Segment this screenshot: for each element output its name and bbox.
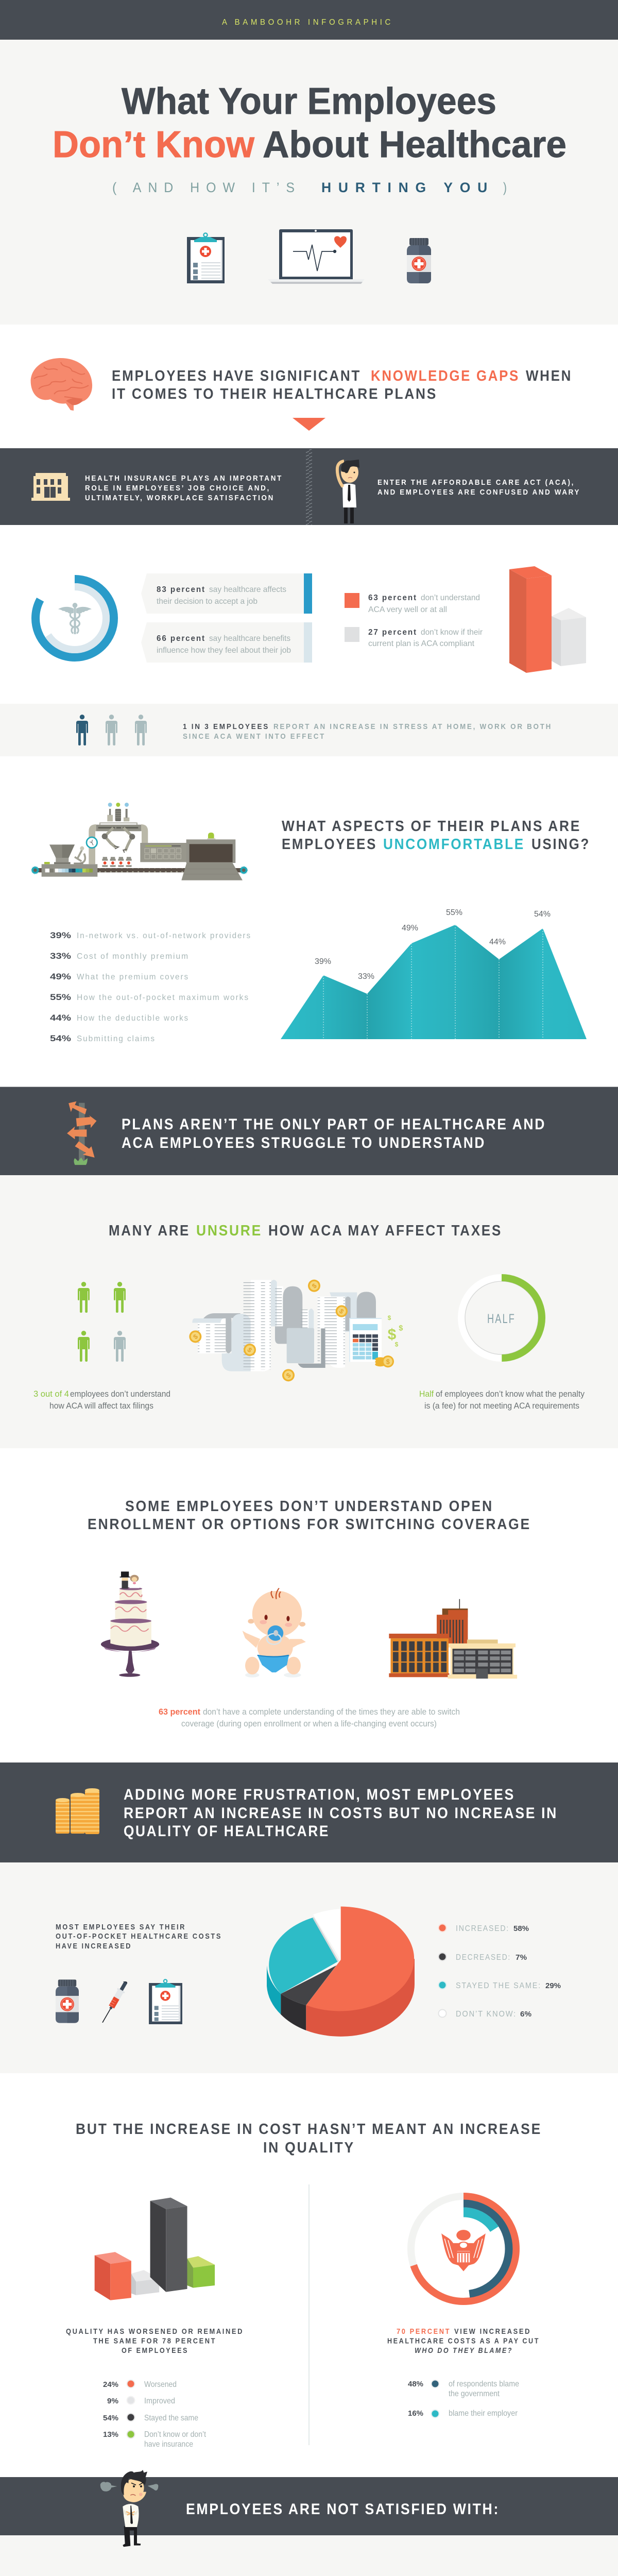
illustration: receipts and calculator: $	[285, 1371, 293, 1379]
heading: uncomfortable: WHAT ASPECTS OF THEIR PLANS ARE	[282, 818, 581, 835]
text: 70 percent pay cut	[387, 2327, 540, 2355]
text: 70 percent pay cut: VIEW INCREASED	[454, 2327, 531, 2336]
legend: pie: INCREASED:	[456, 1924, 509, 1933]
list: uncomfortable aspects: 44%	[50, 1013, 71, 1023]
subtitle: HURTING YOU	[321, 180, 494, 195]
list: uncomfortable aspects: 54%	[50, 1033, 71, 1043]
text: 63 percent coverage: coverage (during open enrollment or when a life-changing event occurs)	[181, 1719, 437, 1728]
chart: nested ring 83 and 66 percent	[36, 579, 114, 657]
heading: knowledge gaps: KNOWLEDGE GAPS	[371, 368, 520, 384]
text: job choice: HEALTH INSURANCE PLAYS AN IMPORTANT	[85, 474, 283, 483]
title: Don’t Know	[53, 124, 255, 165]
text: quality worsened: THE SAME FOR 78 PERCENT	[93, 2337, 216, 2345]
stat: 27 percent: 27 percent	[368, 628, 417, 637]
legend: blame: the government	[449, 2389, 500, 2398]
text: 3 out of 4: 3 out of 4	[33, 1389, 69, 1399]
callout: 83 percent: say healthcare affects	[209, 585, 286, 594]
legend: blame: 48%	[408, 2380, 423, 2388]
heading: plans	[122, 1116, 546, 1151]
text: half of employees: of employees don’t know what the penalty	[436, 1389, 585, 1399]
text: stress: SINCE ACA WENT INTO EFFECT	[183, 732, 325, 741]
chart: area uncomfortable: 44%	[489, 938, 506, 946]
heading: knowledge gaps: EMPLOYEES HAVE SIGNIFICANT	[112, 368, 361, 384]
legend: quality: 13%	[103, 2430, 118, 2439]
chart: 3d bars quality	[95, 2198, 215, 2300]
text: costs increased	[56, 1923, 222, 1951]
illustration: receipts and calculator: $	[386, 1358, 390, 1365]
text: quality worsened	[66, 2327, 244, 2355]
legend: quality	[103, 2380, 206, 2449]
text: 3 out of 4: employees don’t understand	[70, 1389, 170, 1399]
text: 63 percent coverage	[159, 1707, 460, 1728]
icon: angry employee	[100, 2470, 158, 2547]
heading: unsure	[109, 1223, 502, 1239]
legend: pie: 7%	[516, 1953, 527, 1962]
list: uncomfortable aspects: Submitting claims	[77, 1035, 156, 1043]
text: costs increased: OUT-OF-POCKET HEALTHCARE COSTS	[56, 1932, 222, 1941]
panel: 1 in 3 stress	[0, 704, 618, 756]
legend: pie	[439, 1924, 561, 2019]
stat: 63 percent: 63 percent	[368, 594, 417, 602]
heading: unsure: UNSURE	[196, 1223, 262, 1239]
icon: bottle	[56, 1979, 79, 2023]
heading: uncomfortable	[282, 818, 590, 853]
heading: plans: ACA EMPLOYEES STRUGGLE TO UNDERSTAND	[122, 1134, 486, 1151]
subtitle: ( AND HOW IT’S	[112, 180, 301, 195]
illustration: receipts and calculator: $	[192, 1333, 199, 1341]
legend: pie: 58%	[513, 1924, 529, 1933]
stat: 63 percent: ACA very well or at all	[368, 605, 447, 614]
callout: 66 percent: 66 percent	[157, 634, 205, 643]
list: uncomfortable aspects: 55%	[50, 992, 71, 1002]
legend: pie: STAYED THE SAME:	[456, 1981, 541, 1990]
panel: not satisfied	[0, 2470, 618, 2576]
heading: no increase in quality: BUT THE INCREASE IN COST HASN’T MEANT AN INCREASE	[76, 2121, 542, 2138]
legend: quality: Don’t know or don’t	[144, 2430, 206, 2439]
icon: clipboard	[149, 1979, 182, 2024]
panel: plans struggle banner	[0, 1087, 618, 1175]
chart: area uncomfortable	[281, 908, 587, 1039]
heading: knowledge gaps: IT COMES TO THEIR HEALTHCARE PLANS	[112, 386, 437, 402]
chart: area uncomfortable: 49%	[402, 924, 418, 933]
header label: A BAMBOOHR INFOGRAPHIC	[222, 18, 393, 27]
text: 70 percent pay cut: WHO DO THEY BLAME?	[415, 2346, 513, 2355]
text: costs increased: HAVE INCREASED	[56, 1942, 132, 1951]
illustration: receipts and calculator: $	[388, 1314, 391, 1321]
text: quality worsened: QUALITY HAS WORSENED OR REMAINED	[66, 2327, 244, 2336]
subtitle	[112, 180, 507, 195]
text: half of employees: is (a fee) for not meeting ACA requirements	[424, 1401, 579, 1411]
illustration: receipts and calculator: $	[311, 1282, 318, 1290]
callout: 66 percent: influence how they feel about their job	[157, 646, 291, 655]
panel: out-of-pocket costs	[0, 1862, 618, 2073]
title	[53, 81, 566, 165]
heading: unsure: HOW ACA MAY AFFECT TAXES	[268, 1223, 502, 1239]
heading: unsure: MANY ARE	[109, 1223, 190, 1239]
list: uncomfortable aspects: What the premium covers	[77, 973, 189, 981]
icon: brain	[31, 358, 92, 411]
title: What Your Employees	[122, 81, 496, 122]
stat: 63 percent: don’t understand	[421, 594, 480, 602]
heading: open enrollment	[88, 1498, 531, 1533]
list: uncomfortable aspects: Cost of monthly premium	[77, 952, 189, 961]
illustration: receipts and calculator: $	[395, 1341, 399, 1348]
text: enter ACA: ENTER THE AFFORDABLE CARE ACT (ACA),	[377, 478, 575, 487]
text: job choice	[85, 474, 283, 502]
callout: 83 percent	[141, 573, 312, 614]
chart: 3d pie	[267, 1906, 415, 2037]
list: uncomfortable aspects	[50, 930, 251, 1043]
legend: blame: 16%	[408, 2409, 423, 2418]
heading: uncomfortable: EMPLOYEES	[282, 836, 377, 853]
text: job choice: ULTIMATELY, WORKPLACE SATISFACTION	[85, 494, 274, 502]
text: 3 out of 4	[33, 1389, 170, 1411]
text: half of employees: Half	[419, 1389, 434, 1399]
heading: plans: PLANS AREN’T THE ONLY PART OF HEALTHCARE AND	[122, 1116, 546, 1133]
legend: quality: Improved	[144, 2397, 175, 2405]
panel: taxes	[0, 1175, 618, 1448]
stat: 27 percent: current plan is ACA compliant	[368, 639, 475, 648]
chart: area uncomfortable: 55%	[446, 908, 462, 917]
icon: confused employee	[337, 460, 359, 523]
chart: area uncomfortable: 54%	[534, 910, 551, 919]
text: stress: REPORT AN INCREASE IN STRESS AT HOME, WORK OR BOTH	[273, 722, 552, 731]
heading: frustration: REPORT AN INCREASE IN COSTS BUT NO INCREASE IN	[124, 1805, 558, 1822]
list: uncomfortable aspects: 49%	[50, 972, 71, 981]
text: 63 percent coverage: don’t have a complete understanding of the times they are able to switch	[203, 1707, 460, 1717]
arrow: down	[293, 418, 325, 431]
icon: building	[31, 473, 70, 501]
legend: pie: 6%	[520, 2010, 531, 2019]
legend: quality: 54%	[103, 2414, 118, 2422]
header bar	[0, 0, 618, 40]
heading: frustration	[124, 1786, 558, 1840]
heading: open enrollment: SOME EMPLOYEES DON’T UNDERSTAND OPEN	[125, 1498, 493, 1515]
illustration: office buildings	[389, 1599, 517, 1679]
text: stress	[183, 722, 552, 741]
heading: open enrollment: ENROLLMENT OR OPTIONS FOR SWITCHING COVERAGE	[88, 1516, 531, 1533]
list: uncomfortable aspects: 39%	[50, 930, 71, 940]
illustration: baby	[243, 1588, 306, 1677]
icon: clipboard	[187, 233, 225, 283]
callout: 83 percent: their decision to accept a job	[157, 597, 258, 606]
legend: quality: Stayed the same	[144, 2414, 198, 2422]
text: 70 percent pay cut: HEALTHCARE COSTS AS A PAY CUT	[387, 2337, 540, 2345]
heading: uncomfortable: UNCOMFORTABLE	[383, 836, 525, 853]
heading: frustration: ADDING MORE FRUSTRATION, MOST EMPLOYEES	[124, 1786, 515, 1803]
panel: insurance and ACA	[0, 448, 618, 525]
chart: 3d bars ACA understanding	[509, 566, 586, 673]
subtitle: )	[503, 180, 507, 195]
heading: not satisfied: EMPLOYEES ARE NOT SATISFIED WITH:	[186, 2501, 500, 2518]
legend: pie: DON’T KNOW:	[456, 2010, 517, 2019]
legend: quality: have insurance	[144, 2440, 193, 2449]
text: 3 out of 4: how ACA will affect tax filings	[49, 1401, 153, 1411]
illustration: receipts and calculator: $	[388, 1326, 397, 1343]
chart: half ring	[461, 1278, 542, 1358]
icon: signpost arrows	[67, 1101, 96, 1165]
text: 63 percent coverage: 63 percent	[159, 1707, 200, 1717]
stat: 63 percent	[345, 593, 480, 614]
heading: no increase in quality: IN QUALITY	[263, 2140, 355, 2156]
stat: 27 percent: don’t know if their	[421, 628, 483, 637]
icons: 3 of 4 people	[78, 1282, 126, 1362]
callout: 83 percent: 83 percent	[157, 585, 205, 594]
illustration: receipts and calculator: $	[246, 1346, 253, 1354]
icon: syringe	[99, 1979, 130, 2025]
heading: no increase in quality	[76, 2121, 542, 2156]
legend: pie: DECREASED:	[456, 1953, 511, 1962]
list: uncomfortable aspects: How the deductible works	[77, 1014, 189, 1023]
text: 70 percent pay cut: 70 PERCENT	[397, 2327, 451, 2336]
list: uncomfortable aspects: In-network vs. out-of-network providers	[77, 931, 251, 940]
chart: blame rings	[411, 2196, 516, 2301]
icons: three people	[76, 715, 147, 745]
legend: pie: 29%	[545, 1981, 561, 1990]
chart: area uncomfortable: 33%	[358, 972, 374, 981]
legend: quality: 9%	[107, 2397, 118, 2405]
icon: eagle seal	[441, 2230, 486, 2271]
heading: knowledge gaps: WHEN	[526, 368, 572, 384]
legend: quality: Worsened	[144, 2380, 177, 2389]
text: enter ACA	[377, 478, 580, 497]
text: job choice: ROLE IN EMPLOYEES’ JOB CHOICE AND,	[85, 484, 270, 493]
list: uncomfortable aspects: How the out-of-pocket maximum works	[77, 993, 249, 1002]
legend: blame: of respondents blame	[449, 2380, 519, 2388]
text: stress: 1 IN 3 EMPLOYEES	[183, 722, 269, 731]
text: enter ACA: AND EMPLOYEES ARE CONFUSED AND WARY	[377, 488, 580, 497]
heading: uncomfortable: USING?	[531, 836, 590, 853]
legend: blame: blame their employer	[449, 2409, 518, 2418]
text: quality worsened: OF EMPLOYEES	[122, 2346, 188, 2355]
icon: medicine bottle	[407, 238, 431, 283]
illustration: receipts and calculator	[189, 1280, 403, 1381]
panel: hero	[0, 40, 618, 325]
list: uncomfortable aspects: 33%	[50, 951, 71, 961]
title: About Healthcare	[263, 124, 566, 165]
illustration: receipts and calculator: $	[338, 1308, 345, 1315]
chart: half ring: HALF	[487, 1312, 516, 1326]
illustration: production machine	[32, 803, 247, 880]
heading: knowledge gaps	[112, 368, 572, 402]
illustration: receipts and calculator: $	[399, 1324, 403, 1332]
callout: 66 percent	[141, 622, 312, 663]
icon: caduceus	[58, 603, 92, 634]
illustration: wedding cake	[101, 1571, 159, 1677]
callout: 66 percent: say healthcare benefits	[209, 634, 290, 643]
icon: laptop with heartbeat	[268, 229, 365, 284]
panel: frustration banner	[0, 1762, 618, 1862]
stat: 27 percent	[345, 627, 483, 648]
text: half of employees	[419, 1389, 585, 1411]
heading: frustration: QUALITY OF HEALTHCARE	[124, 1823, 330, 1840]
legend: blame	[408, 2380, 519, 2418]
chart: area uncomfortable: 39%	[315, 957, 331, 966]
text: costs increased: MOST EMPLOYEES SAY THEIR	[56, 1923, 186, 1931]
legend: quality: 24%	[103, 2380, 118, 2389]
icon: coin stacks	[56, 1788, 99, 1834]
